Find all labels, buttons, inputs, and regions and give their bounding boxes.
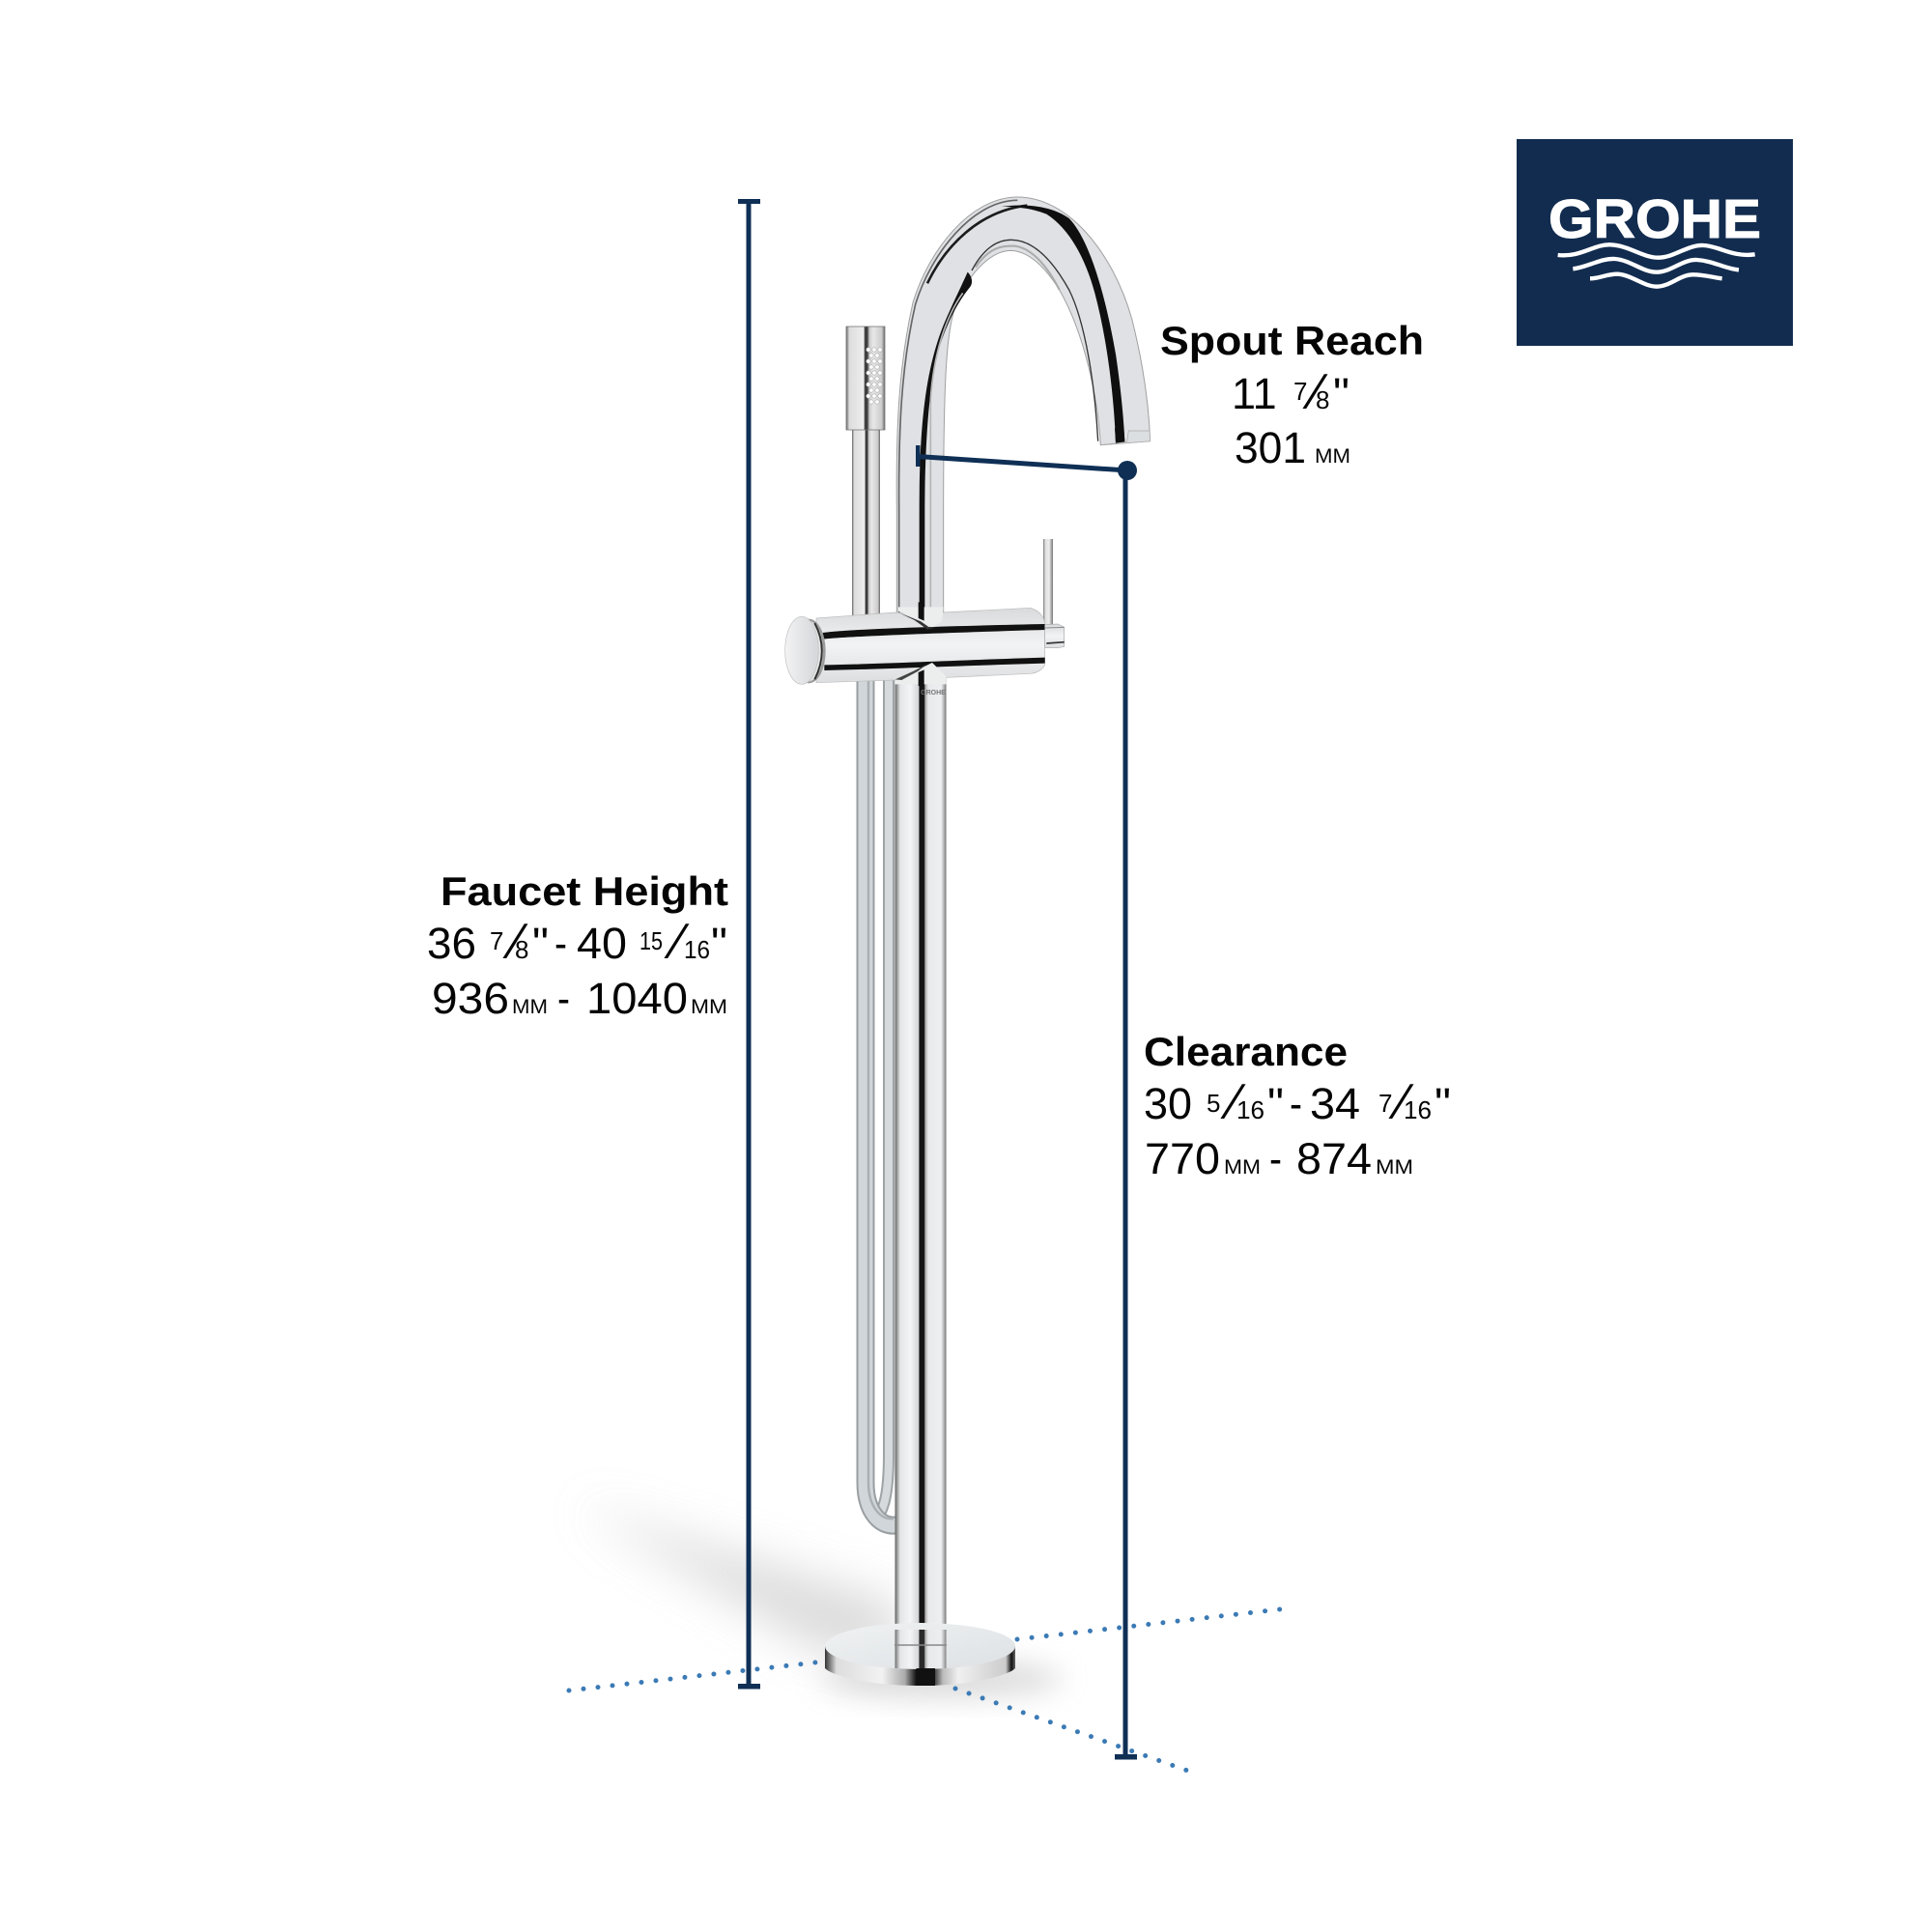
heading: clearance: Clearance [1144, 1029, 1348, 1074]
metric range: clearance: MM [1376, 1156, 1413, 1179]
imperial range: faucet height: " [711, 919, 727, 968]
spout [896, 197, 1151, 628]
imperial range: clearance: 16 [1404, 1095, 1432, 1124]
label: spout reach [1160, 318, 1424, 472]
logo wordmark: GROHE [1548, 188, 1761, 250]
imperial range: faucet height [427, 914, 727, 970]
imperial range: clearance [1144, 1074, 1451, 1130]
GROHE logo [1517, 139, 1793, 346]
metric range: clearance: - [1269, 1134, 1282, 1183]
metric range: faucet height: 1040 [586, 974, 688, 1023]
floor dotted guide lines [569, 1609, 1280, 1770]
hand shower head [846, 327, 885, 618]
metric range: clearance: MM [1224, 1156, 1261, 1179]
imperial range: faucet height: 15 [639, 926, 663, 955]
metric range: clearance: 770 [1145, 1134, 1220, 1183]
faucet illustration [785, 197, 1151, 1686]
imperial range: clearance: " [1435, 1079, 1451, 1128]
heading: faucet height: Faucet Height [440, 868, 728, 914]
imperial range: clearance: 30 [1144, 1079, 1192, 1128]
imperial range: clearance: 16 [1236, 1095, 1264, 1124]
metric range: clearance [1145, 1134, 1413, 1183]
imperial: spout reach [1232, 364, 1350, 420]
imperial range: faucet height: 7 [490, 926, 503, 955]
metric: spout reach: MM [1315, 445, 1350, 468]
label: clearance [1144, 1029, 1451, 1183]
imperial range: clearance: " [1267, 1079, 1284, 1128]
clearance measure line [1115, 470, 1137, 1760]
metric range: clearance: 874 [1296, 1134, 1372, 1183]
imperial range: clearance: - [1290, 1079, 1302, 1128]
imperial: spout reach: ⁄ [1302, 364, 1328, 420]
heading: spout reach: Spout Reach [1160, 318, 1424, 363]
metric: spout reach [1235, 423, 1350, 472]
imperial range: faucet height: 8 [515, 935, 528, 964]
imperial: spout reach: " [1333, 369, 1350, 418]
metric range: faucet height: MM [691, 996, 727, 1018]
spout reach measure line [916, 445, 1137, 480]
imperial: spout reach: 8 [1316, 385, 1329, 414]
round base [825, 1623, 1015, 1686]
imperial: spout reach: 11 [1232, 369, 1277, 418]
metric range: faucet height: 936 [432, 974, 509, 1023]
imperial range: faucet height: - [554, 919, 567, 968]
metric range: faucet height: - [557, 974, 570, 1023]
imperial range: clearance: 5 [1207, 1089, 1220, 1118]
brand mark on column: GROHE [921, 690, 946, 696]
imperial range: faucet height: 40 [577, 919, 627, 968]
mixer body [785, 602, 1065, 686]
imperial range: clearance: ⁄ [1220, 1074, 1246, 1130]
floor shadow [580, 1507, 1063, 1698]
label: faucet height [427, 868, 728, 1023]
imperial range: faucet height: " [532, 919, 549, 968]
lower column [895, 667, 947, 1668]
faucet height measure line [738, 199, 760, 1689]
metric: spout reach: 301 [1235, 423, 1306, 472]
imperial range: faucet height: ⁄ [502, 914, 528, 970]
imperial range: faucet height: 36 [427, 919, 476, 968]
imperial range: faucet height: 16 [684, 935, 710, 964]
hand shower hose [866, 676, 900, 1525]
metric range: faucet height: MM [512, 996, 548, 1018]
metric range: faucet height [432, 974, 727, 1023]
imperial: spout reach: 7 [1293, 377, 1307, 406]
lever handle [1043, 539, 1053, 628]
imperial range: clearance: ⁄ [1388, 1074, 1414, 1130]
imperial range: clearance: 7 [1378, 1089, 1392, 1118]
logo waves [1558, 244, 1755, 287]
imperial range: clearance: 34 [1310, 1079, 1360, 1128]
imperial range: faucet height: ⁄ [664, 914, 690, 970]
